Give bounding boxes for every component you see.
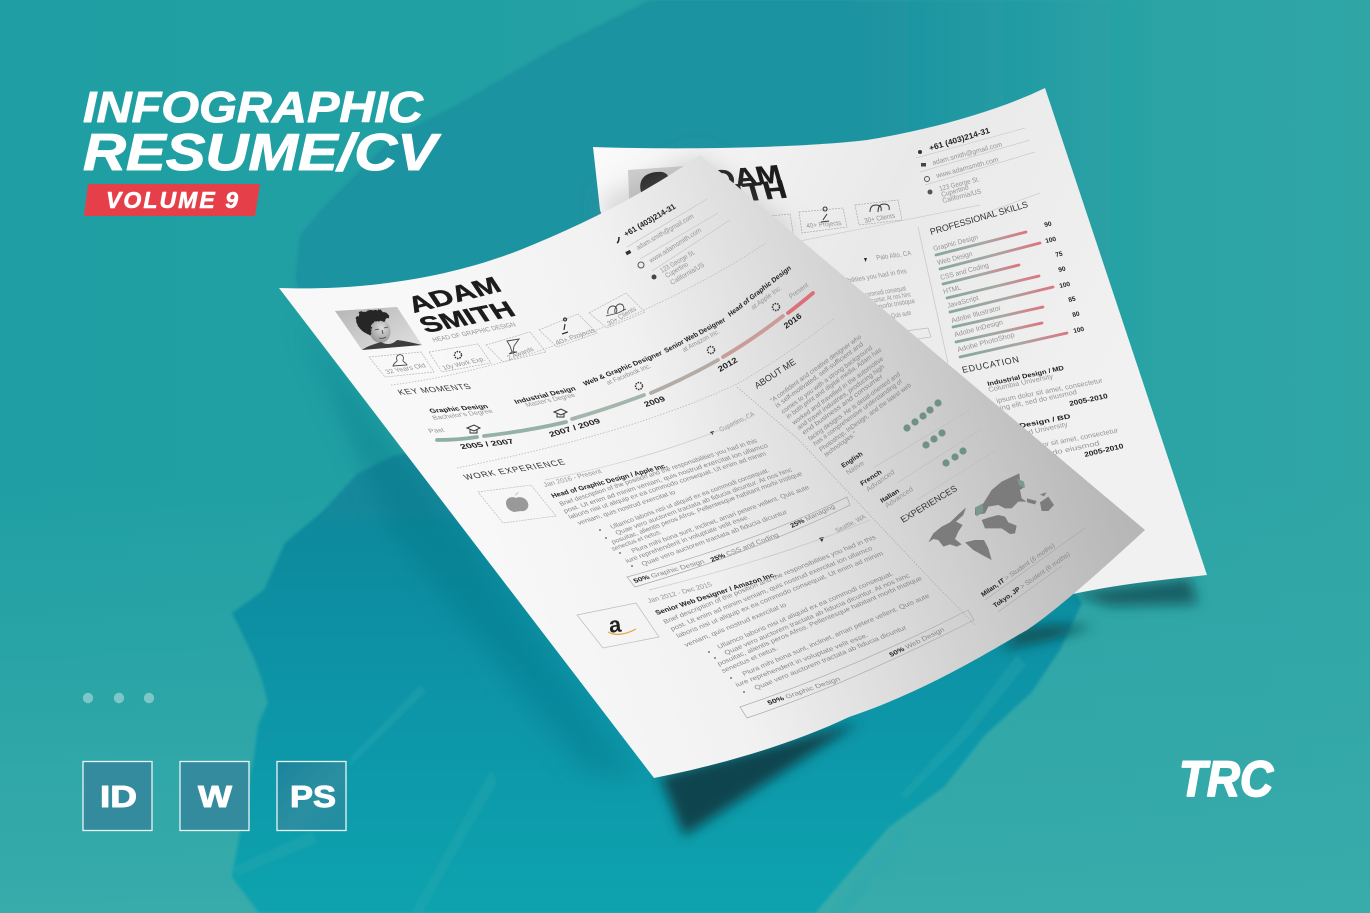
timeline labels: Present (788, 282, 810, 301)
column divider (737, 387, 975, 625)
Apple role text: Quae vero auctorem tractata ab fiducia dicuntur. At nos hinc (614, 467, 795, 537)
chart: skill bars: 85 (1068, 296, 1077, 304)
text: about me paragraph: end business and consumer (801, 373, 885, 437)
Amazon role text: post. Ut enim ad minim veniam, quis nostrud exercitat ion ullamco (669, 545, 875, 633)
back sheet contacts: Cupertino (941, 184, 970, 199)
contacts: California/US (669, 262, 706, 287)
experiences list: Tokyo, JP > Student (6 moths) (992, 551, 1071, 610)
timeline icons (467, 304, 780, 433)
timeline labels: Web & Graphic Designer (582, 350, 664, 388)
Apple role text: Ullamco laboris nisi ut aliquid ex ea commodi consequat. (609, 467, 771, 531)
Apple role text: iure reprehenderit in voluptate velit esse. (624, 514, 751, 565)
timeline labels: 2012 (716, 355, 740, 374)
Apple role text: Quae vero auctorem tractata ab fiducia dicuntur (640, 509, 790, 568)
shadow: front sheet (600, 155, 1094, 836)
text: about me paragraph: in both print and digital media. Adam has (785, 346, 883, 421)
Amazon role text: Jan 2012 - Dec 2015 (646, 582, 714, 605)
education entries: Industrial Design / MD (987, 365, 1065, 388)
Amazon role text: Brief description of the position and the responsibilities you had in this (662, 534, 878, 626)
heading: professional skills: PROFESSIONAL SKILLS (929, 199, 1030, 237)
experiences list: Milan, IT > Student (6 moths) (980, 542, 1056, 599)
Amazon skills box (740, 610, 974, 718)
name: Adam Smith: SMITH (414, 297, 521, 338)
Apple role text: Plura mihi bona sunt, inclinet, amari petere vellent. Quis aute (630, 484, 811, 555)
back sheet partially hidden work text: icuntur. At nos hinc (870, 291, 912, 305)
chart: world map (928, 473, 1054, 560)
text: about me paragraph: technologies." (823, 430, 858, 459)
heading: experiences: EXPERIENCES (899, 483, 959, 525)
Amazon skills box: 50% Web Design (888, 626, 946, 659)
text: about me paragraph: is self-motivated, self-sufficient and (774, 341, 865, 410)
back sheet partially hidden work text: ibilities you had in this (846, 268, 908, 285)
Apple role text: Head of Graphic Design / Apple Inc. (550, 463, 669, 500)
languages: Advanced (865, 469, 896, 494)
name: Adam Smith (402, 272, 521, 344)
Amazon role text: iure reprehenderit in voluptate velit esse. (734, 632, 870, 689)
Amazon role text: Senior Web Designer / Amazon Inc. (654, 572, 778, 617)
divider: below stat boxes (391, 243, 766, 385)
back sheet contacts: 123 George St. (939, 176, 980, 193)
Apple skills box: 25% CSS and Coding (709, 532, 781, 564)
back sheet stat boxes: 40+ Projects (806, 220, 843, 230)
contacts: 123 George St. (659, 249, 697, 275)
timeline labels: Graphic Design (428, 404, 490, 415)
text: about me paragraph: comes to you with a strong background (780, 344, 874, 416)
heading: key moments: KEY MOMENTS (396, 382, 473, 397)
back sheet contacts (800, 126, 1040, 241)
back sheet contacts: +61 (403)214-31 (928, 126, 991, 153)
back sheet photo (628, 165, 700, 220)
Apple role text: Cupertino, CA (718, 411, 757, 434)
badge: volume 9: VOLUME 9 (106, 187, 238, 213)
chart: skill bars: 90 (1044, 221, 1053, 229)
icon: W format box (180, 762, 249, 830)
chart: skill bars: 75 (1055, 251, 1064, 259)
icon: PS format box: PS (290, 779, 336, 814)
Apple role text: posuitac, alientis peros Afros. Pellentesque habitant morbi tristique (610, 471, 804, 546)
title: infographic resume/cv: RESUME/CV (83, 124, 442, 182)
chart: key moments timeline (427, 265, 813, 451)
pagination dots (83, 693, 154, 703)
shadow: back sheet (1072, 578, 1198, 606)
Amazon role text (646, 514, 931, 693)
text: about me paragraph: Photoshop, InDesign, and the latest web (818, 382, 913, 454)
timeline labels: Past (427, 428, 446, 435)
timeline labels: at Apple Inc. (750, 285, 783, 312)
contacts: www.adamsmith.com (647, 227, 703, 265)
back sheet partially hidden work text: Palo Alto, CA (876, 250, 912, 262)
Apple role text: post. Ut enim ad minim veniam, quis nostrud exercitat ion ullamco (562, 443, 770, 515)
text: about me paragraph: facing designs. He is detail-oriented and (807, 371, 902, 443)
Amazon role text: Plura mihi bona sunt, inclinet, amari petere vellent. Quis aute (741, 593, 931, 678)
Amazon role text: Quae vero auctorem tractata ab fiducia dicuntur. At nos hinc (723, 572, 912, 657)
heading: about me: ABOUT ME (753, 357, 798, 391)
education entries: cing elit, sed do eiusmod (996, 389, 1078, 413)
back sheet column divider (918, 227, 948, 363)
front sheet paper (279, 155, 1145, 778)
text: about me paragraph: has a comprehensive understanding of (812, 378, 904, 448)
education entries: rd University (1026, 421, 1069, 437)
Amazon role text: Ullamco laboris nisi ut aliquid ex ea commodi consequat. (716, 570, 895, 651)
stat boxes (369, 293, 645, 377)
name: Adam Smith: HEAD OF GRAPHIC DESIGN (431, 322, 518, 344)
chart: skill bars: 100 (1059, 281, 1072, 290)
Apple role text: laboris nisi ut aliquip ex ea commodo consequat. Ut enim ad minim (567, 451, 768, 521)
icon: ID format box: ID (100, 779, 137, 814)
timeline labels: 2005 / 2007 (458, 438, 517, 451)
Apple role text: Brief description of the position and the responsibilities you had in this (558, 438, 760, 508)
timeline labels: at Facebook Inc. (605, 363, 653, 387)
education entries (987, 365, 1125, 459)
timeline labels: 2016 (782, 311, 804, 331)
back sheet name (683, 159, 790, 212)
languages (840, 399, 996, 510)
name: Adam Smith: ADAM (402, 272, 507, 318)
Apple skills box: 50% Graphic Design (632, 559, 707, 585)
heading: work experience: WORK EXPERIENCE (462, 458, 567, 482)
education entries: 2005-2010 (1069, 393, 1109, 408)
panel: back resume sheet (593, 88, 1207, 597)
badge: volume 9 (84, 184, 260, 216)
icon: apple logo box (478, 485, 556, 523)
text: about me paragraph: and travel industries, producing high (796, 363, 886, 432)
languages: Native (845, 460, 866, 477)
languages: Advanced (884, 486, 915, 510)
contacts: +61 (403)214-31 (622, 202, 678, 239)
Apple role text (542, 411, 811, 568)
back sheet partially hidden work text: morbi tristique (877, 298, 916, 311)
back sheet partially hidden work text: Quis aute (891, 310, 912, 320)
stat boxes: 40+ Projects (554, 327, 597, 347)
chart: skill bars: 80 (1072, 311, 1081, 319)
education entries: do eiusmod (1052, 440, 1101, 457)
timeline labels: Senior Web Designer (663, 317, 727, 355)
Apple role text: senectus et netus. (610, 529, 663, 553)
Apple skills box (627, 497, 850, 587)
chart: skill bars: 100 (1045, 236, 1058, 245)
back sheet name: SMITH (683, 174, 790, 212)
Apple skills box: 25% Managing (789, 503, 837, 530)
back sheet contacts: www.adamsmith.com (935, 157, 1000, 180)
back sheet paper (593, 88, 1207, 597)
stat boxes: 2 Awards (506, 346, 536, 362)
languages: English (840, 451, 864, 470)
job: Amazon (577, 514, 974, 718)
chart: skill bars: 100 (1073, 326, 1086, 335)
education entries: ipsum dolor sit amet, consectetur (996, 377, 1104, 405)
contacts: Cupertino (664, 261, 690, 280)
back sheet name: ADAM (687, 159, 785, 196)
Amazon role text: posuitac, alientis peros Afros. Pellentesque habitant morbi tristique (716, 575, 924, 668)
back sheet contacts: adam.smith@gmail.com (932, 142, 1003, 167)
back sheet stat boxes (760, 200, 902, 235)
Amazon role text: veniam, quis nostrud exercitat io (683, 602, 788, 649)
back sheet stat boxes: 30+ Clients (864, 213, 897, 225)
chart: skill bars: HTML (943, 285, 962, 296)
chart: skill bars (933, 221, 1086, 357)
stat boxes: 30+ Clients (606, 306, 638, 328)
chart: skill bars: Adobe PhotoShop (957, 332, 1016, 354)
Amazon role text: laboris nisi ut aliquip ex ea commodo consequat. Ut enim ad minim (675, 550, 885, 640)
education entries: Columbia University (988, 373, 1055, 394)
timeline labels: 2007 / 2009 (547, 417, 603, 439)
back sheet partially hidden work text (846, 250, 931, 340)
logo: TRC: TRC (1179, 751, 1274, 807)
timeline labels: Master's Degree (524, 392, 577, 409)
text: about me paragraph: "A confident and creative designer who (769, 333, 863, 405)
stat boxes: 10y Work Exp. (441, 356, 487, 372)
chart: skill bars: Adobe Illustrator (951, 305, 1002, 325)
chart: skill bars: 90 (1058, 266, 1067, 274)
education entries: ic Design / BD (1009, 413, 1072, 432)
timeline labels: Industrial Design (513, 386, 577, 406)
Amazon role text: Seattle, WA (834, 514, 868, 535)
icon: W format box: W (198, 779, 233, 814)
back sheet contacts: California/US (942, 188, 983, 205)
chart: skill bars: Web Design (937, 251, 973, 267)
timeline labels (427, 265, 810, 451)
chart: skill bars: CSS and Coding (940, 262, 990, 282)
title: infographic resume/cv: INFOGRAPHIC (83, 83, 424, 132)
title: infographic resume/cv (83, 83, 442, 182)
heading: education: EDUCATION (961, 354, 1021, 375)
education entries: or sit amet, consectetur (1042, 427, 1120, 449)
photo: portrait (335, 307, 422, 350)
text: about me paragraph: worked and travelled in the automotive (790, 355, 885, 427)
chart: skill bars: Graphic Design (933, 234, 979, 253)
timeline labels: Head of Graphic Design (727, 265, 793, 319)
education entries: 2005-2010 (1084, 443, 1125, 459)
Amazon skills box: 50% Graphic Design (766, 676, 842, 707)
panel: front resume sheet (279, 155, 1145, 778)
icon: amazon logo box (577, 603, 659, 648)
chart: skill bars: Adobe InDesign (954, 319, 1004, 339)
Amazon role text: senectus et netus. (720, 645, 780, 675)
Amazon role text: Quae vero auctorem tractata ab fiducia dicuntur (753, 624, 909, 692)
icon: ID format box (83, 762, 152, 830)
Apple role text: veniam, quis nostrud exercitat io (576, 489, 677, 527)
Apple role text: Jan 2016 - Present (542, 469, 603, 489)
back sheet partially hidden work text: commodi consequat (865, 285, 907, 299)
timeline labels: at Amazon Inc. (681, 329, 721, 354)
experiences list (980, 528, 1085, 612)
chart: skill bars: JavaScript (947, 295, 980, 310)
job: Apple (478, 411, 850, 587)
text: about me paragraph (769, 333, 913, 459)
divider: below timeline (457, 318, 835, 468)
contacts: adam.smith@gmail.com (635, 213, 696, 252)
icon: amazon logo box: a (608, 612, 623, 638)
timeline labels: 2009 (642, 394, 668, 409)
timeline labels: Bachelor's Degree (431, 409, 495, 422)
languages: French (859, 469, 883, 488)
contacts (617, 199, 730, 287)
languages: Italian (879, 488, 901, 505)
stat boxes: 32 Years Old (384, 363, 428, 376)
icon: PS format box (277, 762, 346, 830)
